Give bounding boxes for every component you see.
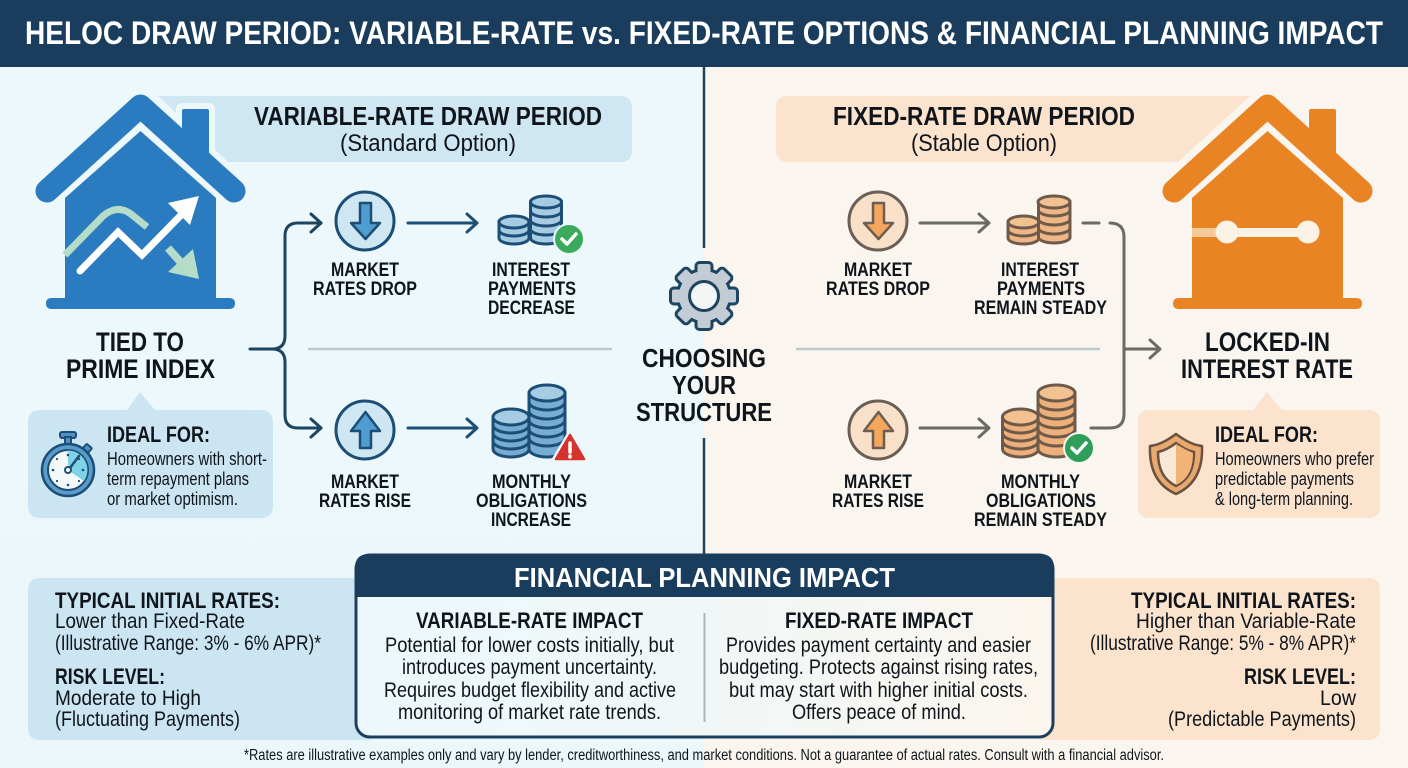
panel: variable rates and risk: TYPICAL INITIAL RATES:	[55, 588, 280, 613]
text: fixed-rate impact	[719, 608, 1038, 724]
text: variable-rate impact	[384, 608, 676, 724]
label: interest payments decrease: PAYMENTS	[488, 279, 576, 300]
label: market rates drop	[313, 260, 417, 300]
label: interest payments remain steady	[974, 260, 1107, 319]
arrow: rise to obligations increase	[408, 419, 477, 437]
icon: blue house with rate chart	[46, 103, 235, 309]
footnote: *Rates are illustrative examples only and vary by lender, creditworthiness, and market conditions. Not a guarantee of actual rates. Consult with a financial advisor.	[244, 747, 1164, 764]
text: fixed-rate impact: FIXED-RATE IMPACT	[785, 608, 973, 633]
text: choosing your structure: STRUCTURE	[636, 397, 772, 427]
panel: fixed rates and risk	[1040, 578, 1380, 740]
label: interest payments decrease: DECREASE	[488, 298, 575, 319]
text: ideal for fixed description: predictable payments	[1215, 469, 1354, 489]
label: market rates rise	[319, 472, 411, 512]
icon: shield	[1150, 434, 1202, 494]
text: fixed-rate impact: but may start with higher initial costs.	[729, 679, 1028, 702]
heading: variable-rate draw period	[158, 96, 632, 162]
heading: variable-rate draw period: VARIABLE-RATE DRAW PERIOD	[254, 101, 602, 131]
label: interest payments remain steady: INTEREST	[1001, 260, 1079, 281]
label: fixed market rates drop: RATES DROP	[826, 279, 930, 300]
label: fixed market rates drop: MARKET	[844, 260, 912, 281]
panel: ideal for variable	[28, 392, 273, 518]
label: market rates drop: RATES DROP	[313, 279, 417, 300]
label: interest payments remain steady: PAYMENTS	[997, 279, 1085, 300]
text: choosing your structure: CHOOSING	[642, 343, 766, 373]
label: monthly obligations remain steady	[974, 472, 1107, 531]
label: market rates drop: MARKET	[331, 260, 399, 281]
text: ideal for fixed description: & long-term planning.	[1215, 489, 1353, 509]
text: tied to prime index: PRIME INDEX	[66, 354, 215, 384]
label: monthly obligations remain steady: MONTHLY	[1001, 472, 1080, 493]
label: interest payments remain steady: REMAIN STEADY	[974, 298, 1107, 319]
text: locked-in interest rate	[1181, 327, 1353, 384]
label: monthly obligations remain steady: OBLIGATIONS	[986, 491, 1096, 512]
text: variable-rate impact: Requires budget flexibility and active	[384, 679, 676, 702]
label: market rates rise: RATES RISE	[319, 491, 411, 512]
title banner	[0, 0, 1408, 67]
text: ideal for variable description	[107, 422, 267, 509]
panel: financial planning impact	[355, 554, 1054, 737]
icon: gear	[672, 264, 736, 328]
panel: fixed rates and risk: (Illustrative Range: 5% - 8% APR)*	[1090, 632, 1356, 655]
panel: variable rates and risk: (Fluctuating Payments)	[55, 708, 240, 731]
text: variable-rate impact: VARIABLE-RATE IMPACT	[416, 608, 643, 633]
panel: fixed rates and risk: Low	[1320, 687, 1357, 710]
heading: variable-rate draw period: (Standard Option)	[340, 130, 516, 157]
text: tied to prime index	[66, 327, 215, 384]
icon: variable market rates rise	[336, 401, 394, 459]
text: ideal for variable description: term repayment plans	[107, 469, 249, 489]
heading: fixed-rate draw period	[776, 96, 1250, 162]
icon: fixed market rates rise	[849, 401, 907, 459]
heading: fixed-rate draw period: FIXED-RATE DRAW PERIOD	[833, 101, 1135, 131]
label: monthly obligations increase	[476, 472, 587, 531]
text: variable-rate impact: Potential for lower costs initially, but	[385, 634, 674, 657]
panel: ideal for fixed	[1138, 392, 1380, 518]
text: ideal for fixed description	[1215, 422, 1374, 509]
icon: orange coins	[1008, 196, 1070, 244]
text: choosing your structure	[636, 343, 772, 427]
label: monthly obligations remain steady: REMAIN STEADY	[974, 510, 1107, 531]
text: locked-in interest rate: INTEREST RATE	[1181, 354, 1353, 384]
panel: variable rates and risk: Moderate to High	[55, 687, 201, 710]
panel: fixed rates and risk: Higher than Variable-Rate	[1136, 610, 1356, 633]
panel: financial planning impact: FINANCIAL PLANNING IMPACT	[514, 562, 895, 593]
text: ideal for variable description: Homeowners with short-	[107, 449, 267, 469]
text: ideal for variable description: IDEAL FOR:	[107, 422, 210, 447]
center divider line	[703, 67, 705, 556]
panel: variable rates and risk: (Illustrative Range: 3% - 6% APR)*	[55, 632, 321, 655]
label: interest payments decrease	[488, 260, 576, 319]
text: choosing your structure: YOUR	[672, 370, 736, 400]
text: fixed-rate impact: budgeting. Protects against rising rates,	[719, 656, 1038, 679]
panel: variable rates and risk: Lower than Fixed-Rate	[55, 610, 245, 633]
icon: fixed market rates drop	[849, 192, 907, 250]
arrow: rise to obligations steady	[920, 419, 989, 437]
text: tied to prime index: TIED TO	[96, 327, 184, 357]
icon: variable market rates drop	[336, 192, 394, 250]
arrow: drop to interest decrease	[408, 214, 477, 232]
label: monthly obligations increase: INCREASE	[491, 510, 571, 531]
panel: variable rates and risk: RISK LEVEL:	[55, 664, 165, 689]
label: monthly obligations increase: OBLIGATIONS	[476, 491, 587, 512]
panel: fixed rates and risk: (Predictable Payments)	[1168, 708, 1356, 731]
icon: orange coins with check	[1002, 385, 1094, 463]
text: variable-rate impact: monitoring of market rate trends.	[398, 701, 661, 724]
panel: variable rates and risk	[28, 578, 370, 740]
branch arrow: prime index to outcomes	[250, 214, 321, 437]
text: locked-in interest rate: LOCKED-IN	[1205, 327, 1330, 357]
merge arrow: outcomes to locked-in rate	[1083, 223, 1160, 428]
text: ideal for fixed description: Homeowners who prefer	[1215, 449, 1374, 469]
icon: coins with check	[499, 196, 584, 254]
text: fixed-rate impact: Offers peace of mind.	[792, 701, 966, 724]
row dividers	[308, 348, 1100, 350]
icon: orange house with locked rate	[1173, 106, 1362, 309]
icon: stopwatch	[42, 432, 94, 496]
panel: fixed rates and risk: RISK LEVEL:	[1244, 664, 1356, 689]
panel: fixed rates and risk: TYPICAL INITIAL RATES:	[1131, 588, 1356, 613]
text: ideal for variable description: or market optimism.	[107, 489, 238, 509]
text: ideal for fixed description: IDEAL FOR:	[1215, 422, 1318, 447]
label: fixed market rates rise	[832, 472, 924, 512]
heading: fixed-rate draw period: (Stable Option)	[911, 130, 1057, 157]
label: fixed market rates drop	[826, 260, 930, 300]
text: fixed-rate impact: Provides payment certainty and easier	[726, 634, 1031, 657]
arrow: drop to payments steady	[920, 214, 989, 232]
icon: coins with warning	[493, 385, 586, 460]
label: monthly obligations increase: MONTHLY	[492, 472, 571, 493]
text: variable-rate impact: introduces payment uncertainty.	[402, 656, 657, 679]
label: interest payments decrease: INTEREST	[492, 260, 570, 281]
label: market rates rise: MARKET	[331, 472, 399, 493]
label: fixed market rates rise: RATES RISE	[832, 491, 924, 512]
label: fixed market rates rise: MARKET	[844, 472, 912, 493]
